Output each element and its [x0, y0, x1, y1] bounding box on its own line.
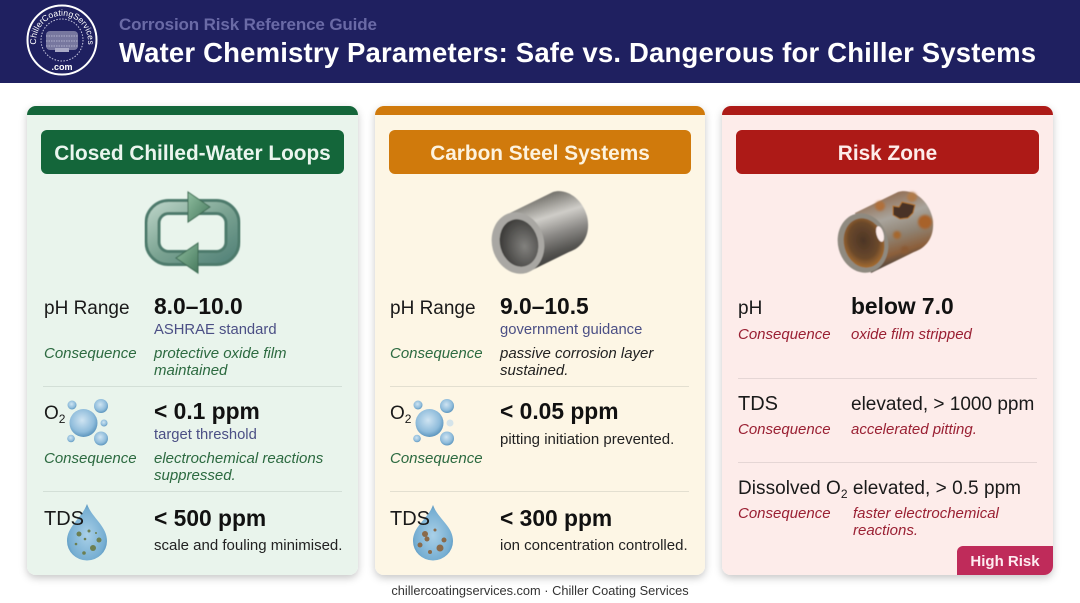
- badge: high risk: High Risk: [970, 553, 1040, 570]
- pH row: [738, 293, 973, 343]
- pH range row: pH Range: [44, 298, 130, 319]
- pH range row: passive corrosion layer: [499, 345, 654, 362]
- dissolved oxygen row: reactions.: [853, 522, 918, 539]
- pH row: below 7.0: [851, 293, 954, 319]
- heading: closed loops: [41, 130, 344, 174]
- pH range row: Consequence: [44, 345, 137, 362]
- TDS row: [44, 504, 342, 560]
- TDS row: Consequence: [738, 421, 831, 438]
- TDS row: TDS: [390, 508, 430, 530]
- logo badge: [26, 4, 98, 76]
- pH row: oxide film stripped: [851, 326, 973, 343]
- dissolved oxygen row: Dissolved O: [738, 478, 841, 499]
- pH range row: ASHRAE standard: [154, 322, 277, 338]
- icon: recirculating loop: [152, 192, 232, 273]
- TDS row: TDS: [44, 508, 84, 530]
- heading: carbon steel: Carbon Steel Systems: [430, 142, 650, 165]
- logo badge: ChillerCoatingServices: [30, 9, 93, 44]
- pH range row: [44, 293, 287, 379]
- badge: high risk: [957, 546, 1053, 575]
- icon: steel pipe: [485, 191, 588, 280]
- dissolved oxygen row: Consequence: [738, 505, 831, 522]
- TDS row: < 300 ppm: [500, 505, 612, 531]
- pH range row: protective oxide film: [153, 345, 287, 362]
- pH range row: 9.0–10.5: [500, 293, 589, 319]
- dissolved oxygen row: 2: [841, 487, 848, 501]
- oxygen row: O: [44, 403, 59, 424]
- logo badge: .com: [51, 62, 73, 72]
- oxygen row: 2: [59, 412, 66, 426]
- title: Water Chemistry Parameters: Safe vs. Dangerous for Chiller Systems: [119, 37, 1036, 68]
- oxygen row: O: [390, 403, 405, 424]
- oxygen row: electrochemical reactions: [154, 450, 324, 467]
- pH row: Consequence: [738, 326, 831, 343]
- dissolved oxygen row: elevated, > 0.5 ppm: [848, 478, 1021, 499]
- TDS row: [390, 505, 688, 560]
- heading: carbon steel: [389, 130, 691, 174]
- panel: risk zone: [722, 106, 1053, 575]
- oxygen row: < 0.1 ppm: [154, 398, 260, 424]
- eyebrow text: Corrosion Risk Reference Guide: [119, 15, 377, 34]
- oxygen row: 2: [405, 412, 412, 426]
- TDS row: accelerated pitting.: [851, 421, 977, 438]
- oxygen row: Consequence: [44, 450, 137, 467]
- icon: water drop with particles: [413, 505, 453, 560]
- icon: water drop with particles: [67, 504, 107, 560]
- TDS row: < 500 ppm: [154, 505, 266, 531]
- TDS row: [738, 393, 1034, 438]
- oxygen row: Consequence: [390, 450, 483, 467]
- oxygen row: suppressed.: [154, 467, 236, 484]
- pH range row: sustained.: [500, 362, 568, 379]
- TDS row: ion concentration controlled.: [500, 537, 688, 554]
- pH range row: 8.0–10.0: [154, 293, 243, 319]
- dissolved oxygen row: faster electrochemical: [853, 505, 1000, 522]
- pH row: pH: [738, 298, 762, 319]
- oxygen row: [44, 398, 324, 484]
- pH range row: maintained: [154, 362, 228, 379]
- pH range row: pH Range: [390, 298, 476, 319]
- panel: carbon steel systems: [375, 106, 705, 575]
- heading: risk zone: [736, 130, 1039, 174]
- pH range row: [390, 293, 654, 379]
- footer: chillercoatingservices.com · Chiller Coating Services: [391, 583, 689, 598]
- oxygen row: target threshold: [154, 427, 257, 443]
- heading: risk zone: Risk Zone: [838, 142, 937, 165]
- heading: closed loops: Closed Chilled-Water Loops: [54, 142, 331, 165]
- oxygen row: < 0.05 ppm: [500, 398, 618, 424]
- oxygen row: pitting initiation prevented.: [500, 431, 674, 448]
- oxygen row: [390, 398, 674, 467]
- icon: corroded pipe: [831, 191, 933, 278]
- pH range row: government guidance: [500, 322, 642, 338]
- dissolved oxygen row: [738, 478, 1021, 539]
- TDS row: TDS: [738, 393, 778, 415]
- panel: closed chilled-water loops: [27, 106, 358, 575]
- pH range row: Consequence: [390, 345, 483, 362]
- icon: oxygen bubbles: [67, 399, 108, 446]
- icon: oxygen bubbles: [413, 399, 454, 446]
- TDS row: scale and fouling minimised.: [154, 537, 342, 554]
- header band: [0, 0, 1080, 83]
- TDS row: elevated, > 1000 ppm: [851, 394, 1034, 415]
